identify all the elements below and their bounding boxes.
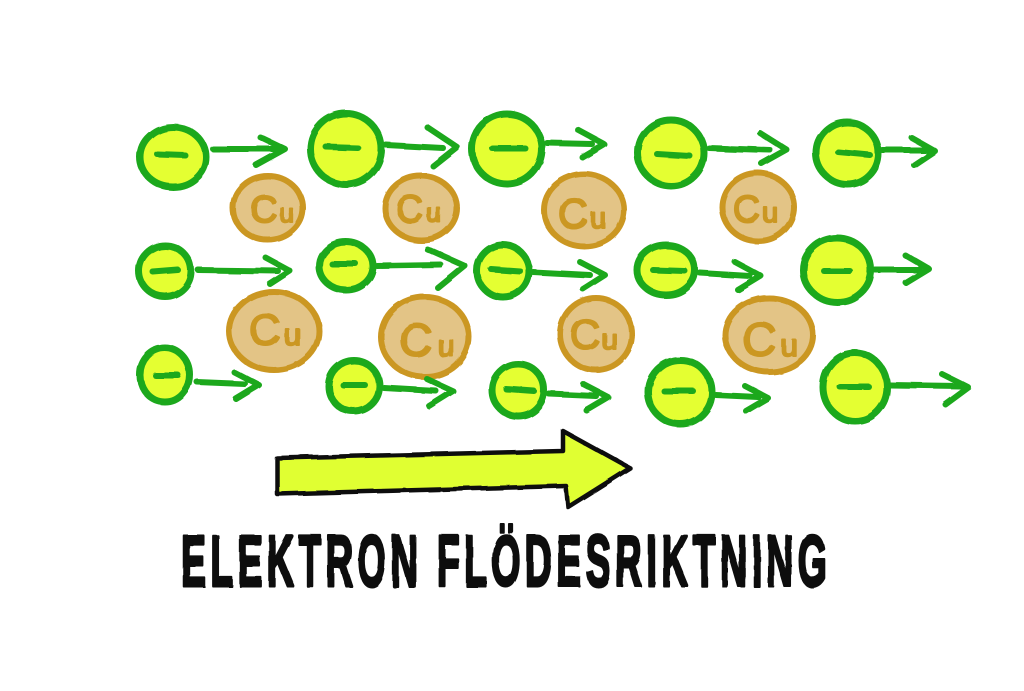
large direction arrow — [277, 431, 630, 507]
copper atom 5 — [229, 292, 319, 370]
copper atom 2 — [385, 176, 457, 240]
copper atom 7 — [560, 298, 632, 370]
electron row 1, 1 — [140, 127, 285, 187]
electron row 3, 5 — [823, 353, 968, 421]
copper atom 7: Cu — [570, 311, 617, 358]
electron row 3, 2 — [328, 360, 453, 412]
copper atom 1 — [233, 176, 303, 240]
electron row 2, 3 — [477, 245, 605, 297]
electron row 2, 5 — [803, 238, 929, 302]
electron row 3, 4 — [648, 360, 768, 424]
copper atom 6 — [381, 297, 469, 377]
electron row 1, 3 — [472, 114, 604, 184]
copper atom 8 — [725, 298, 813, 372]
copper atom 5: Cu — [249, 306, 301, 355]
copper atom 3: Cu — [558, 190, 606, 237]
copper atom 1: Cu — [250, 189, 294, 231]
caption: ELEKTRON FLÖDESRIKTNING — [181, 522, 827, 602]
electron row 2, 4 — [637, 245, 761, 295]
electron row 2, 1 — [139, 246, 290, 296]
electron row 1, 4 — [638, 120, 787, 186]
copper atom 2: Cu — [396, 189, 441, 231]
copper atom 4: Cu — [733, 189, 778, 231]
electron row 3, 3 — [492, 364, 608, 416]
electron row 2, 2 — [319, 242, 465, 290]
copper atom 8: Cu — [742, 314, 798, 367]
electron row 1, 2 — [310, 114, 457, 184]
electron row 1, 5 — [816, 122, 935, 184]
copper atom 4 — [722, 173, 794, 241]
copper atom 6: Cu — [399, 314, 454, 366]
copper atom 3 — [544, 174, 624, 246]
electron row 3, 1 — [140, 348, 259, 402]
